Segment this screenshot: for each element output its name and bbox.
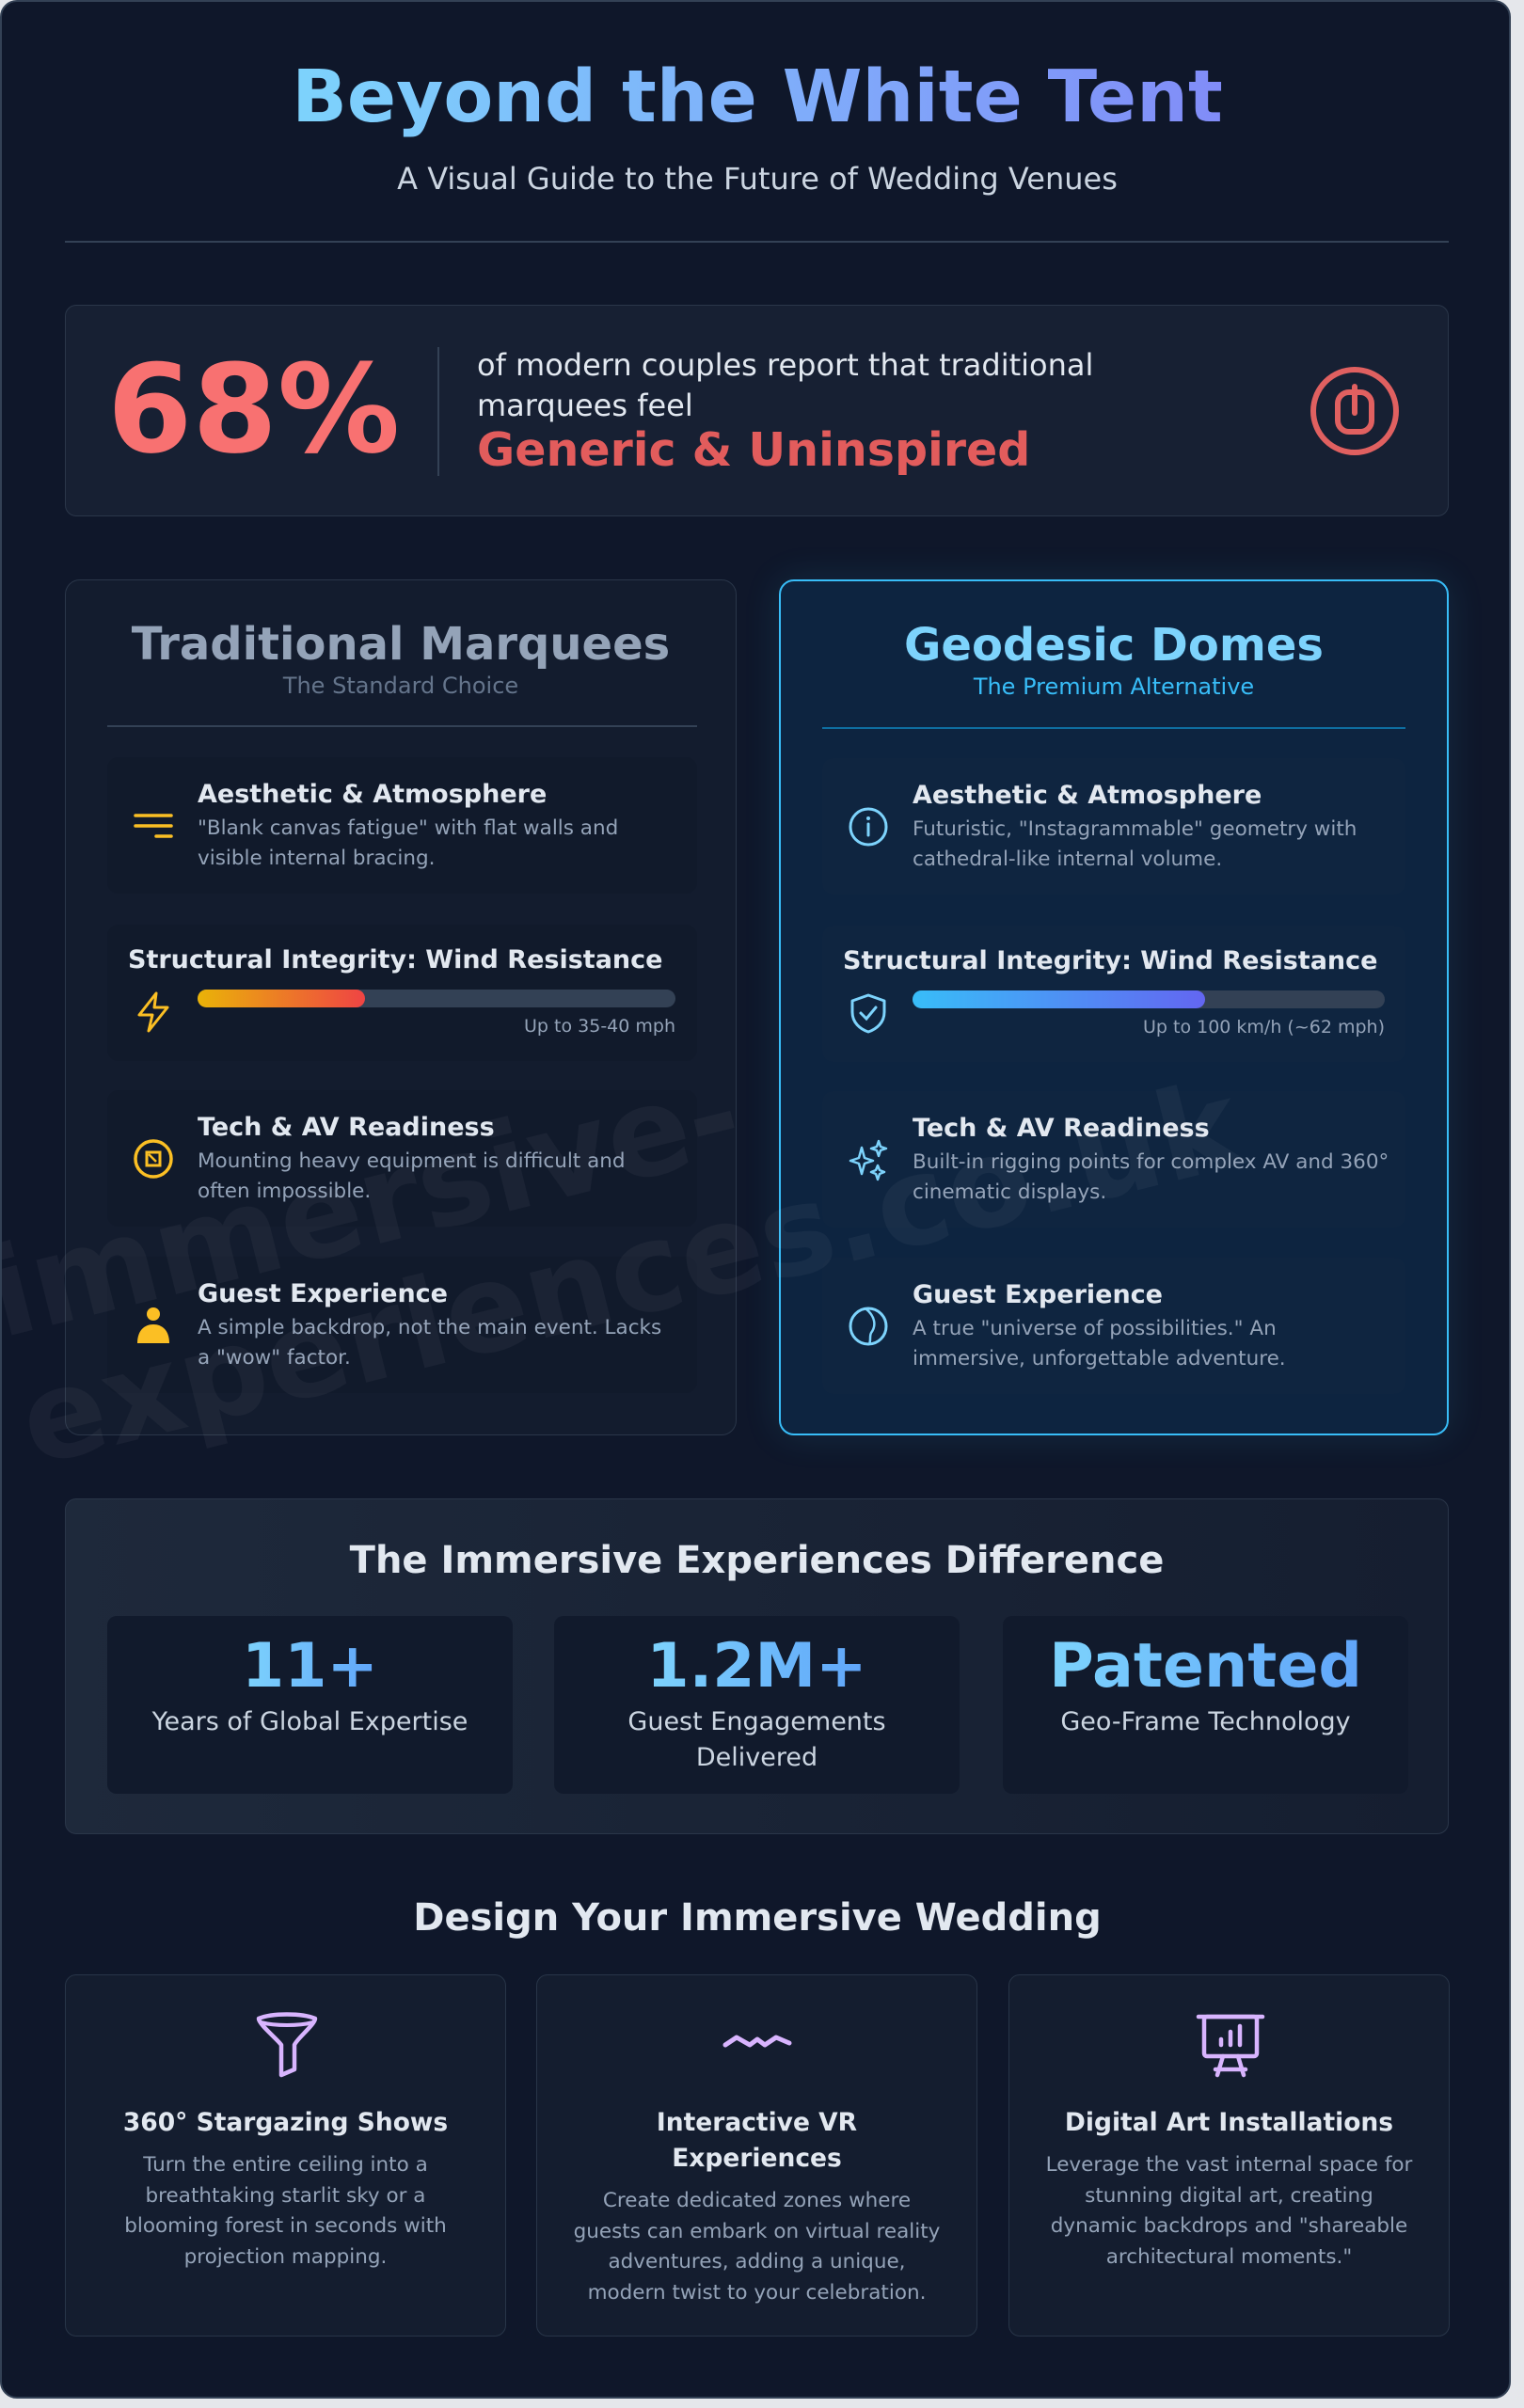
panel: immersive experiences difference: [65, 1498, 1449, 1834]
watermark: experiences.co.uk: [7, 1053, 1254, 1494]
stat: years: 11+: [242, 1631, 378, 1702]
card: VR: [536, 1974, 977, 2337]
big stat 68%: 68%: [107, 338, 400, 481]
stat: guests: [554, 1616, 960, 1794]
stat text: of modern couples report that traditional: [477, 347, 1093, 383]
icon: globe: [849, 1307, 888, 1345]
feature: tech: [822, 1091, 1405, 1228]
icon: box: [134, 1139, 173, 1179]
icon: person: [137, 1307, 169, 1343]
feature: aesthetic: Futuristic, "Instagrammable" geometry with cathedral-like internal volume.: [913, 817, 1357, 871]
heading: Traditional Marquees: [132, 618, 670, 671]
stat: guests: 1.2M+: [646, 1631, 867, 1702]
subtitle: A Visual Guide to the Future of Wedding Venues: [397, 161, 1118, 197]
feature: aesthetic: Aesthetic & Atmosphere: [913, 781, 1262, 810]
stat text: [477, 347, 1093, 477]
feature: guest: A true "universe of possibilities." An immersive, unforgettable adventure.: [913, 1317, 1286, 1370]
stat: patented: [1003, 1616, 1408, 1794]
stat text: marquees feel: [477, 388, 693, 423]
icon: presentation chart: [1197, 2015, 1264, 2077]
title: Beyond the White Tent: [292, 55, 1223, 139]
icon: info: [849, 807, 888, 847]
feature: tech: Mounting heavy equipment is difficult and often impossible.: [198, 1149, 626, 1203]
feature: guest: A simple backdrop, not the main event. Lacks a "wow" factor.: [198, 1316, 661, 1370]
feature: tech: Tech & AV Readiness: [198, 1113, 495, 1142]
feature: guest: [107, 1257, 697, 1393]
icon: power: [1310, 367, 1399, 455]
icon: funnel: [256, 2012, 318, 2077]
card: stargazing: [65, 1974, 506, 2337]
card: digital art: [1008, 1974, 1450, 2337]
icon: lines: [134, 814, 173, 838]
feature: wind resistance: Structural Integrity: Wind Resistance: [128, 945, 662, 974]
stat: guests: Delivered: [696, 1743, 818, 1772]
feature: wind resistance: Up to 100 km/h (~62 mph): [1143, 1017, 1385, 1038]
panel: geodesic domes: The Premium Alternative: [974, 673, 1254, 700]
feature: tech: [107, 1090, 697, 1227]
card: stargazing: 360° Stargazing Shows: [123, 2108, 448, 2137]
card: VR: Experiences: [672, 2144, 842, 2173]
stat: years: [107, 1616, 513, 1794]
panel: traditional marquees: [65, 579, 737, 1435]
icon: sparkles: [849, 1140, 888, 1181]
stat: patented: Patented: [1049, 1631, 1362, 1702]
card: VR: Interactive VR: [657, 2108, 857, 2137]
card: digital art: Digital Art Installations: [1065, 2108, 1393, 2137]
panel: traditional marquees: The Standard Choice: [283, 673, 518, 699]
heading: design: Design Your Immersive Wedding: [413, 1896, 1102, 1940]
panel: geodesic domes: [779, 579, 1449, 1435]
feature: guest: Guest Experience: [913, 1280, 1163, 1309]
feature: aesthetic: Aesthetic & Atmosphere: [198, 780, 547, 809]
stat: years: Years of Global Expertise: [152, 1707, 468, 1736]
card: stargazing: Turn the entire ceiling into a breathtaking starlit sky or a blooming forest in seconds with projection mapping.: [124, 2153, 447, 2269]
icon: lightning: [137, 991, 169, 1033]
feature: wind resistance: Up to 35-40 mph: [524, 1016, 675, 1037]
bar chart: [913, 990, 1385, 1008]
stat: guests: Guest Engagements: [627, 1707, 886, 1736]
feature: aesthetic: [107, 757, 697, 894]
feature: aesthetic: "Blank canvas fatigue" with flat walls and visible internal bracing.: [198, 816, 618, 870]
feature: aesthetic: [822, 758, 1405, 895]
feature: guest: Guest Experience: [198, 1279, 448, 1308]
feature: wind resistance: [107, 925, 697, 1061]
stat panel: [65, 305, 1449, 516]
icon: shield: [850, 993, 886, 1033]
feature: wind resistance: [822, 926, 1405, 1062]
feature: wind resistance: Structural Integrity: Wind Resistance: [843, 946, 1377, 975]
feature: guest: [822, 1258, 1405, 1394]
feature: tech: Tech & AV Readiness: [913, 1114, 1210, 1143]
heading: The Immersive Experiences Difference: [350, 1539, 1164, 1582]
bar chart: [198, 990, 675, 1007]
icon: VR wave: [722, 2036, 792, 2047]
feature: tech: Built-in rigging points for complex AV and 360° cinematic displays.: [913, 1150, 1389, 1204]
stat text: Generic & Uninspired: [477, 423, 1030, 477]
stat: patented: Geo-Frame Technology: [1060, 1707, 1351, 1736]
card: VR: Create dedicated zones where guests can embark on virtual reality adventures, adding a unique, modern twist to your celebration.: [574, 2189, 940, 2305]
heading: Geodesic Domes: [904, 619, 1324, 672]
card: digital art: Leverage the vast internal space for stunning digital art, creating dynamic backdrops and "shareable architectural moments.": [1046, 2153, 1412, 2269]
